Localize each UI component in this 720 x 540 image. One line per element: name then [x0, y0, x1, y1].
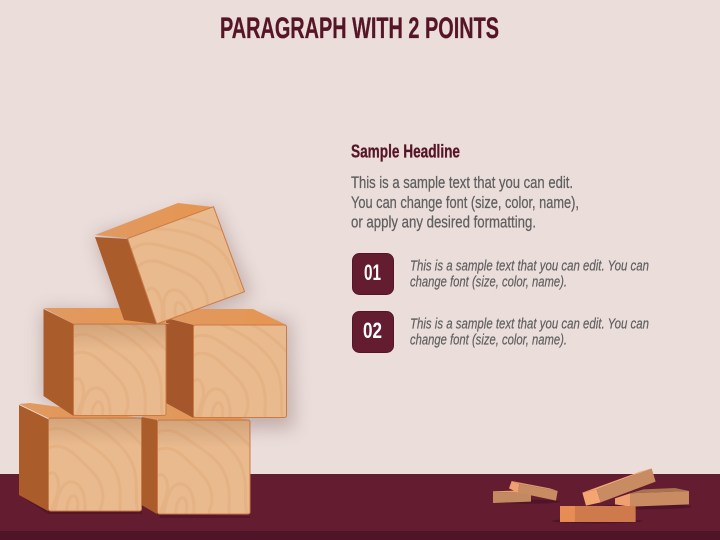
- block shadows: [43, 207, 294, 430]
- point 01 text: change font (size, color, name).: [410, 274, 567, 290]
- point 01 text: [410, 258, 649, 290]
- body paragraph: You can change font (size, color, name),: [351, 193, 579, 212]
- piece: bottom centre: [560, 506, 636, 522]
- piece: left flat: [493, 491, 531, 503]
- block: tilted top: [95, 203, 244, 324]
- block: middle right: [166, 309, 286, 418]
- piece: left tilted: [509, 481, 558, 501]
- floor band: [0, 474, 720, 540]
- body paragraph: [351, 173, 579, 232]
- title: PARAGRAPH WITH 2 POINTS: [220, 12, 499, 45]
- badge 02: 02: [363, 318, 382, 343]
- point 02 text: This is a sample text that you can edit. You can: [410, 316, 649, 332]
- illustration: broken wood pieces: [493, 468, 692, 523]
- badge 01: 01: [364, 260, 381, 285]
- block: middle left: [44, 308, 170, 416]
- body paragraph: This is a sample text that you can edit.: [351, 173, 573, 192]
- illustration: stacked wooden blocks: [19, 203, 294, 518]
- headline: Sample Headline: [351, 142, 460, 162]
- point 01 text: This is a sample text that you can edit. You can: [410, 258, 649, 274]
- piece: tilted: [582, 468, 656, 506]
- piece: far right: [615, 488, 689, 507]
- point 02 text: [410, 316, 649, 348]
- point 02: [352, 312, 649, 352]
- badge 01: [352, 254, 394, 294]
- block: bottom right: [142, 403, 250, 518]
- block: bottom left: [19, 403, 142, 514]
- body paragraph: or apply any desired formatting.: [351, 212, 536, 232]
- point 02 text: change font (size, color, name).: [410, 332, 567, 348]
- point 01: [352, 254, 649, 294]
- badge 02: [352, 312, 394, 352]
